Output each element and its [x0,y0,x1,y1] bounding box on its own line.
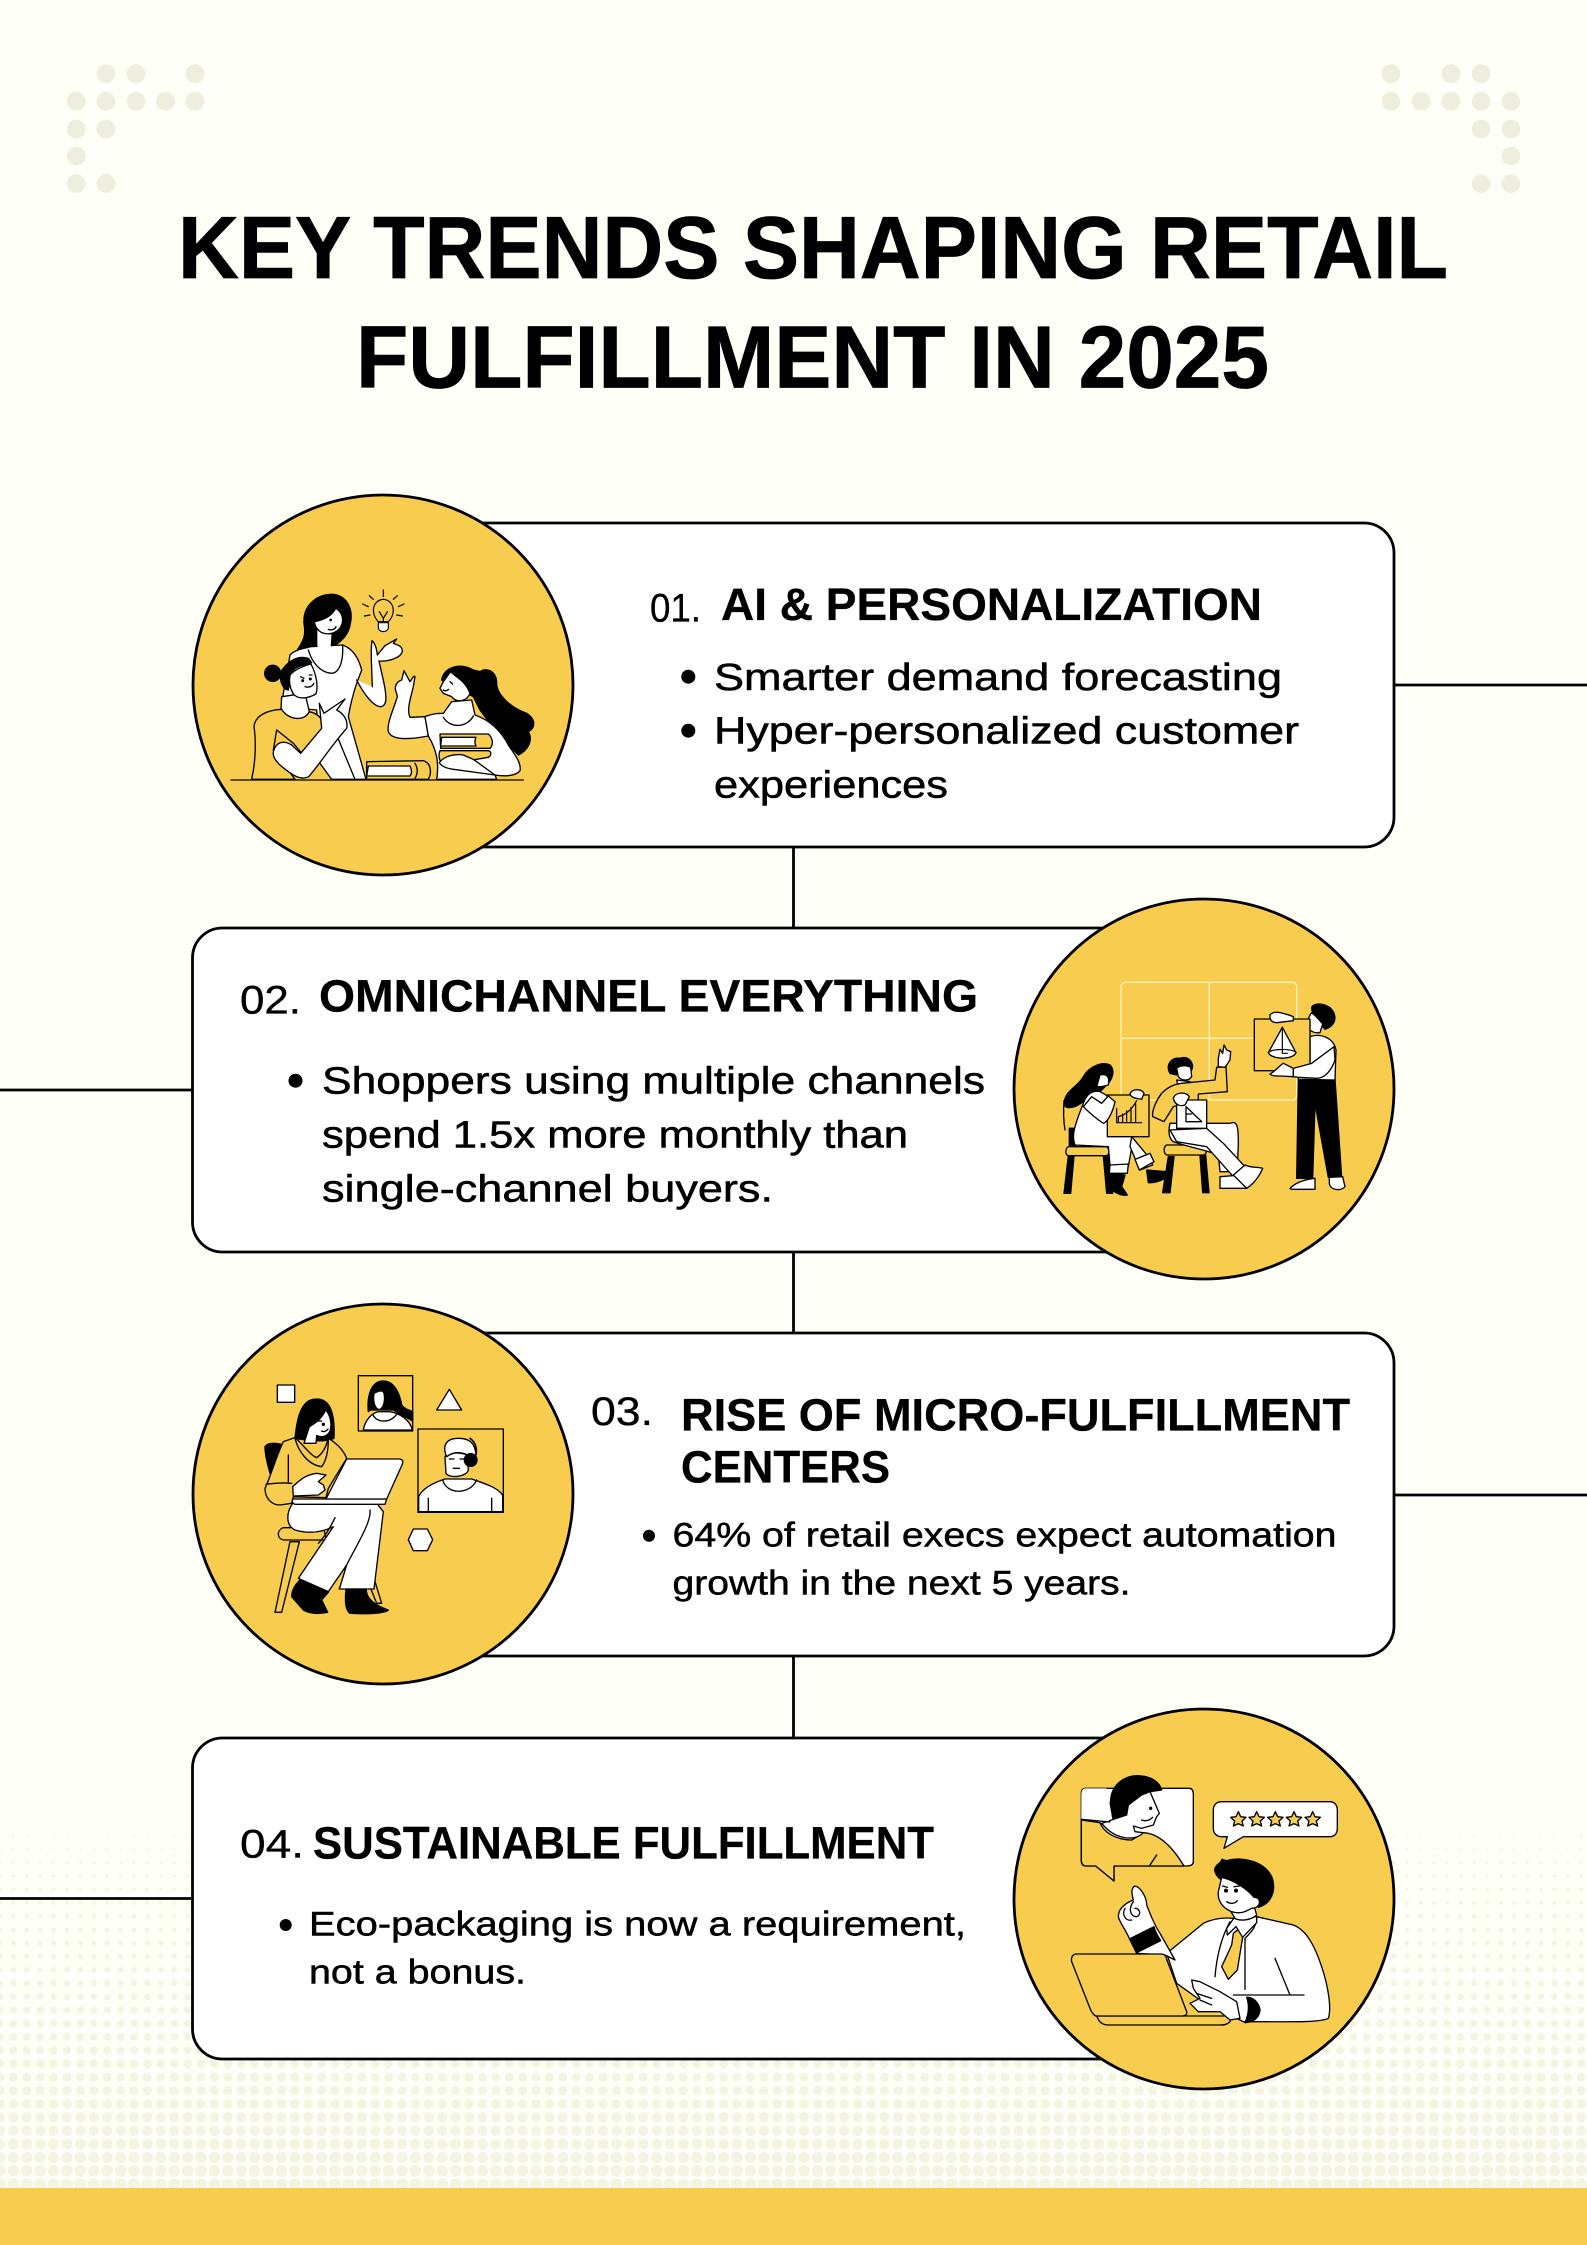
bullet list 04: not a bonus. [309,1953,526,1991]
bullet list 02: spend 1.5x more monthly than [322,1114,908,1156]
card 03 [420,1333,1394,1656]
bullet list 02 [288,1060,985,1211]
circle 02 [1014,899,1394,1279]
title [178,198,1448,406]
laptop [292,1459,403,1504]
number 02: 02. [240,978,301,1022]
floating shapes [277,1385,462,1551]
woman hair [295,1399,334,1441]
bullet list 04 [280,1906,966,1991]
bullet list 02: Shoppers using multiple channels [322,1060,985,1102]
panel: trend 02 omnichannel everything [192,899,1394,1279]
left woman on chair [1064,1064,1171,1195]
bulb [363,590,404,632]
panel: trend 04 sustainable fulfillment [192,1709,1394,2089]
video chat bubble [1081,1776,1193,1881]
number 01: 01. [650,587,701,631]
bullet list 01: Smarter demand forecasting [714,657,1282,699]
seated man [252,657,347,779]
icon: team sharing an idea [231,590,534,780]
icon: team presenting charts [1064,982,1345,1195]
card 02 [192,928,1152,1252]
board grid [1121,982,1297,1100]
bullet list 01: Hyper-personalized customer [714,710,1299,752]
bullet list 03: 64% of retail execs expect automation [672,1517,1336,1555]
raised hand [1118,1886,1175,1960]
bullet list 03 [643,1517,1336,1602]
woman sweater [265,1438,347,1505]
bottom yellow band [0,2188,1587,2245]
dot cluster top right [1382,64,1520,193]
woman face [304,1410,331,1443]
typing hand and cuff [1190,1980,1260,2023]
circle 03 [193,1304,573,1684]
number 04: 04. [240,1822,304,1866]
chair seat and legs [275,1528,382,1612]
heading 03: RISE OF MICRO-FULFILLMENT [681,1390,1350,1441]
video frame woman [358,1376,413,1431]
panel: trend 03 micro-fulfillment centers [193,1304,1394,1684]
heading 01: AI & PERSONALIZATION [721,579,1262,630]
icon: customer review chat [1071,1776,1337,2025]
table line [231,778,523,782]
woman shoes [292,1580,388,1614]
man neck and face [1215,1859,1274,1920]
standing woman [282,594,402,779]
bullet list 02: single-channel buyers. [322,1169,773,1211]
title: KEY TRENDS SHAPING RETAIL [178,198,1448,297]
video frame man with headset [418,1429,503,1512]
heading 03: CENTERS [681,1442,890,1493]
table book [367,761,430,779]
heading 03 [681,1390,1350,1493]
card 01 [420,523,1394,847]
connector lines [0,685,1587,1898]
laptop [1071,1954,1232,2025]
bullet list 04: Eco-packaging is now a requirement, [309,1906,966,1944]
number 03: 03. [591,1390,653,1434]
tie and collar [1222,1917,1257,1979]
bullet list 03: growth in the next 5 years. [672,1564,1130,1602]
right man with cone board [1254,1004,1345,1190]
rating speech bubble [1213,1802,1337,1848]
circle 04 [1014,1709,1394,2089]
card 04 [192,1738,1152,2059]
icon: video meeting on laptop [265,1376,503,1614]
circle 01 [193,495,573,875]
chair back [265,1443,283,1473]
panel: trend 01 AI and personalization [193,495,1394,875]
dot cluster top left [67,64,204,193]
title: FULFILLMENT IN 2025 [356,308,1269,406]
heading 04: SUSTAINABLE FULFILLMENT [313,1818,934,1869]
right woman [388,666,534,779]
man torso [1167,1917,1330,2022]
center man on chair [1153,1045,1263,1193]
bullet list 01 [681,657,1299,806]
bullet list 01: experiences [714,764,948,806]
heading 02: OMNICHANNEL EVERYTHING [319,971,978,1022]
woman trousers [288,1503,383,1592]
